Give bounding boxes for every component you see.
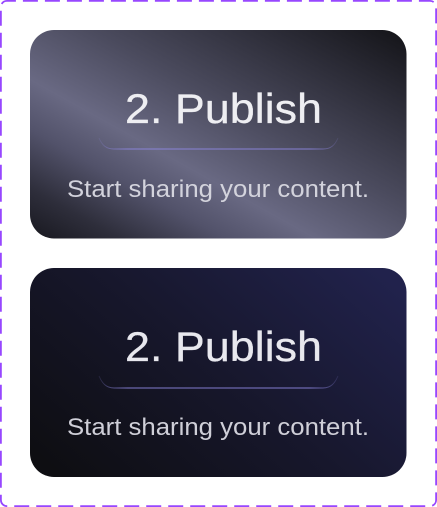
panel: dark gradient card	[30, 268, 406, 477]
underline	[99, 376, 338, 388]
panel: light gradient card	[30, 30, 406, 238]
heading: 2. Publish	[125, 323, 322, 370]
card background	[30, 268, 406, 477]
heading: 2. Publish	[125, 85, 322, 132]
underline	[99, 138, 338, 149]
subtitle: Start sharing your content.	[67, 414, 369, 441]
card background	[30, 30, 406, 238]
subtitle: Start sharing your content.	[67, 176, 369, 203]
